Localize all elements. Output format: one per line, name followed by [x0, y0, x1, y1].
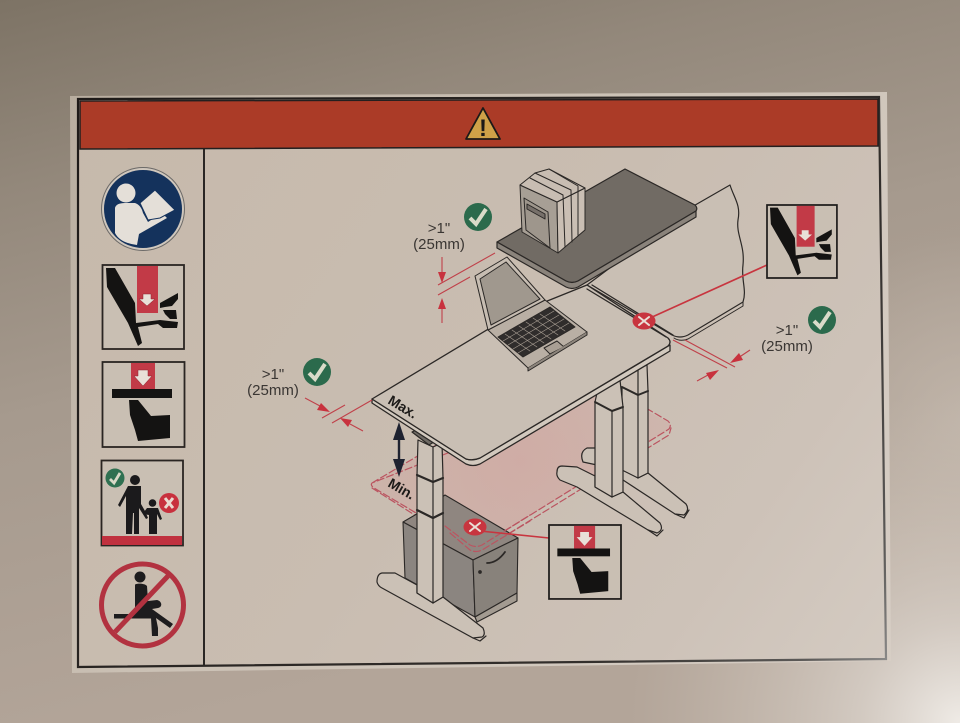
clearance note: top left [413, 203, 492, 253]
clearance note: left: (25mm) [247, 382, 299, 399]
icon: adult and child [118, 475, 162, 534]
rear column [622, 365, 648, 478]
icon: foot crush hazard [102, 362, 184, 447]
callout: finger pinch icon [767, 205, 837, 278]
icon: read the manual [102, 168, 184, 250]
icon: red cross marker rear [632, 312, 656, 330]
books [520, 169, 585, 253]
icon: keep children away [102, 460, 183, 546]
dimension lines: left clearance [305, 398, 372, 431]
return desk top with wavy break [587, 185, 744, 337]
middle column [595, 380, 623, 497]
clearance note: top left: >1" [428, 220, 450, 237]
middle foot [557, 466, 661, 533]
rear desk feet and legs [557, 365, 689, 536]
icon: warning triangle [466, 108, 500, 142]
shelf [497, 169, 697, 288]
icon: green check [106, 468, 124, 488]
icon: warning triangle: ! [479, 115, 487, 142]
dimension lines: right clearance [673, 340, 750, 381]
diagram: L-shaped desk isometric illustration [371, 169, 767, 641]
text: Max.: Max. [385, 392, 420, 422]
hazard zone dashes over cabinet [445, 515, 530, 552]
clearance note: right: (25mm) [761, 338, 813, 355]
front foot [377, 573, 484, 638]
clearance note: right: >1" [776, 322, 798, 339]
icon: check top [464, 203, 492, 231]
clearance note: top left: (25mm) [413, 236, 465, 253]
sidebar divider [203, 149, 205, 665]
clearance note: left: >1" [262, 366, 284, 383]
icon: red cross [159, 493, 179, 513]
header: red warning band [80, 99, 878, 149]
callout: foot crush icon [549, 525, 621, 599]
front desk leg [377, 428, 486, 641]
front hazard leader line [480, 531, 549, 538]
icon: hand pinch hazard [102, 265, 184, 349]
arrow: height travel [393, 422, 405, 477]
front column [417, 475, 443, 603]
icon: do not sit on desk [102, 564, 184, 646]
rear foot [582, 448, 688, 515]
clearance note: left [247, 358, 331, 399]
hazard zone: pink dashed crush area [371, 370, 671, 552]
clearance note: right [761, 306, 836, 355]
main desk top [372, 285, 673, 466]
dimension lines: top left clearance [438, 253, 495, 323]
icon: red cross marker front [464, 518, 486, 536]
icon: check right [808, 306, 836, 334]
icon: check left [303, 358, 331, 386]
laptop [475, 257, 587, 371]
cabinet under desk [403, 495, 518, 622]
text: Min.: Min. [386, 475, 418, 503]
rear hazard leader line [650, 265, 767, 318]
label panel frame [78, 97, 886, 667]
label sheet [70, 92, 891, 673]
slot between desks [587, 285, 673, 337]
